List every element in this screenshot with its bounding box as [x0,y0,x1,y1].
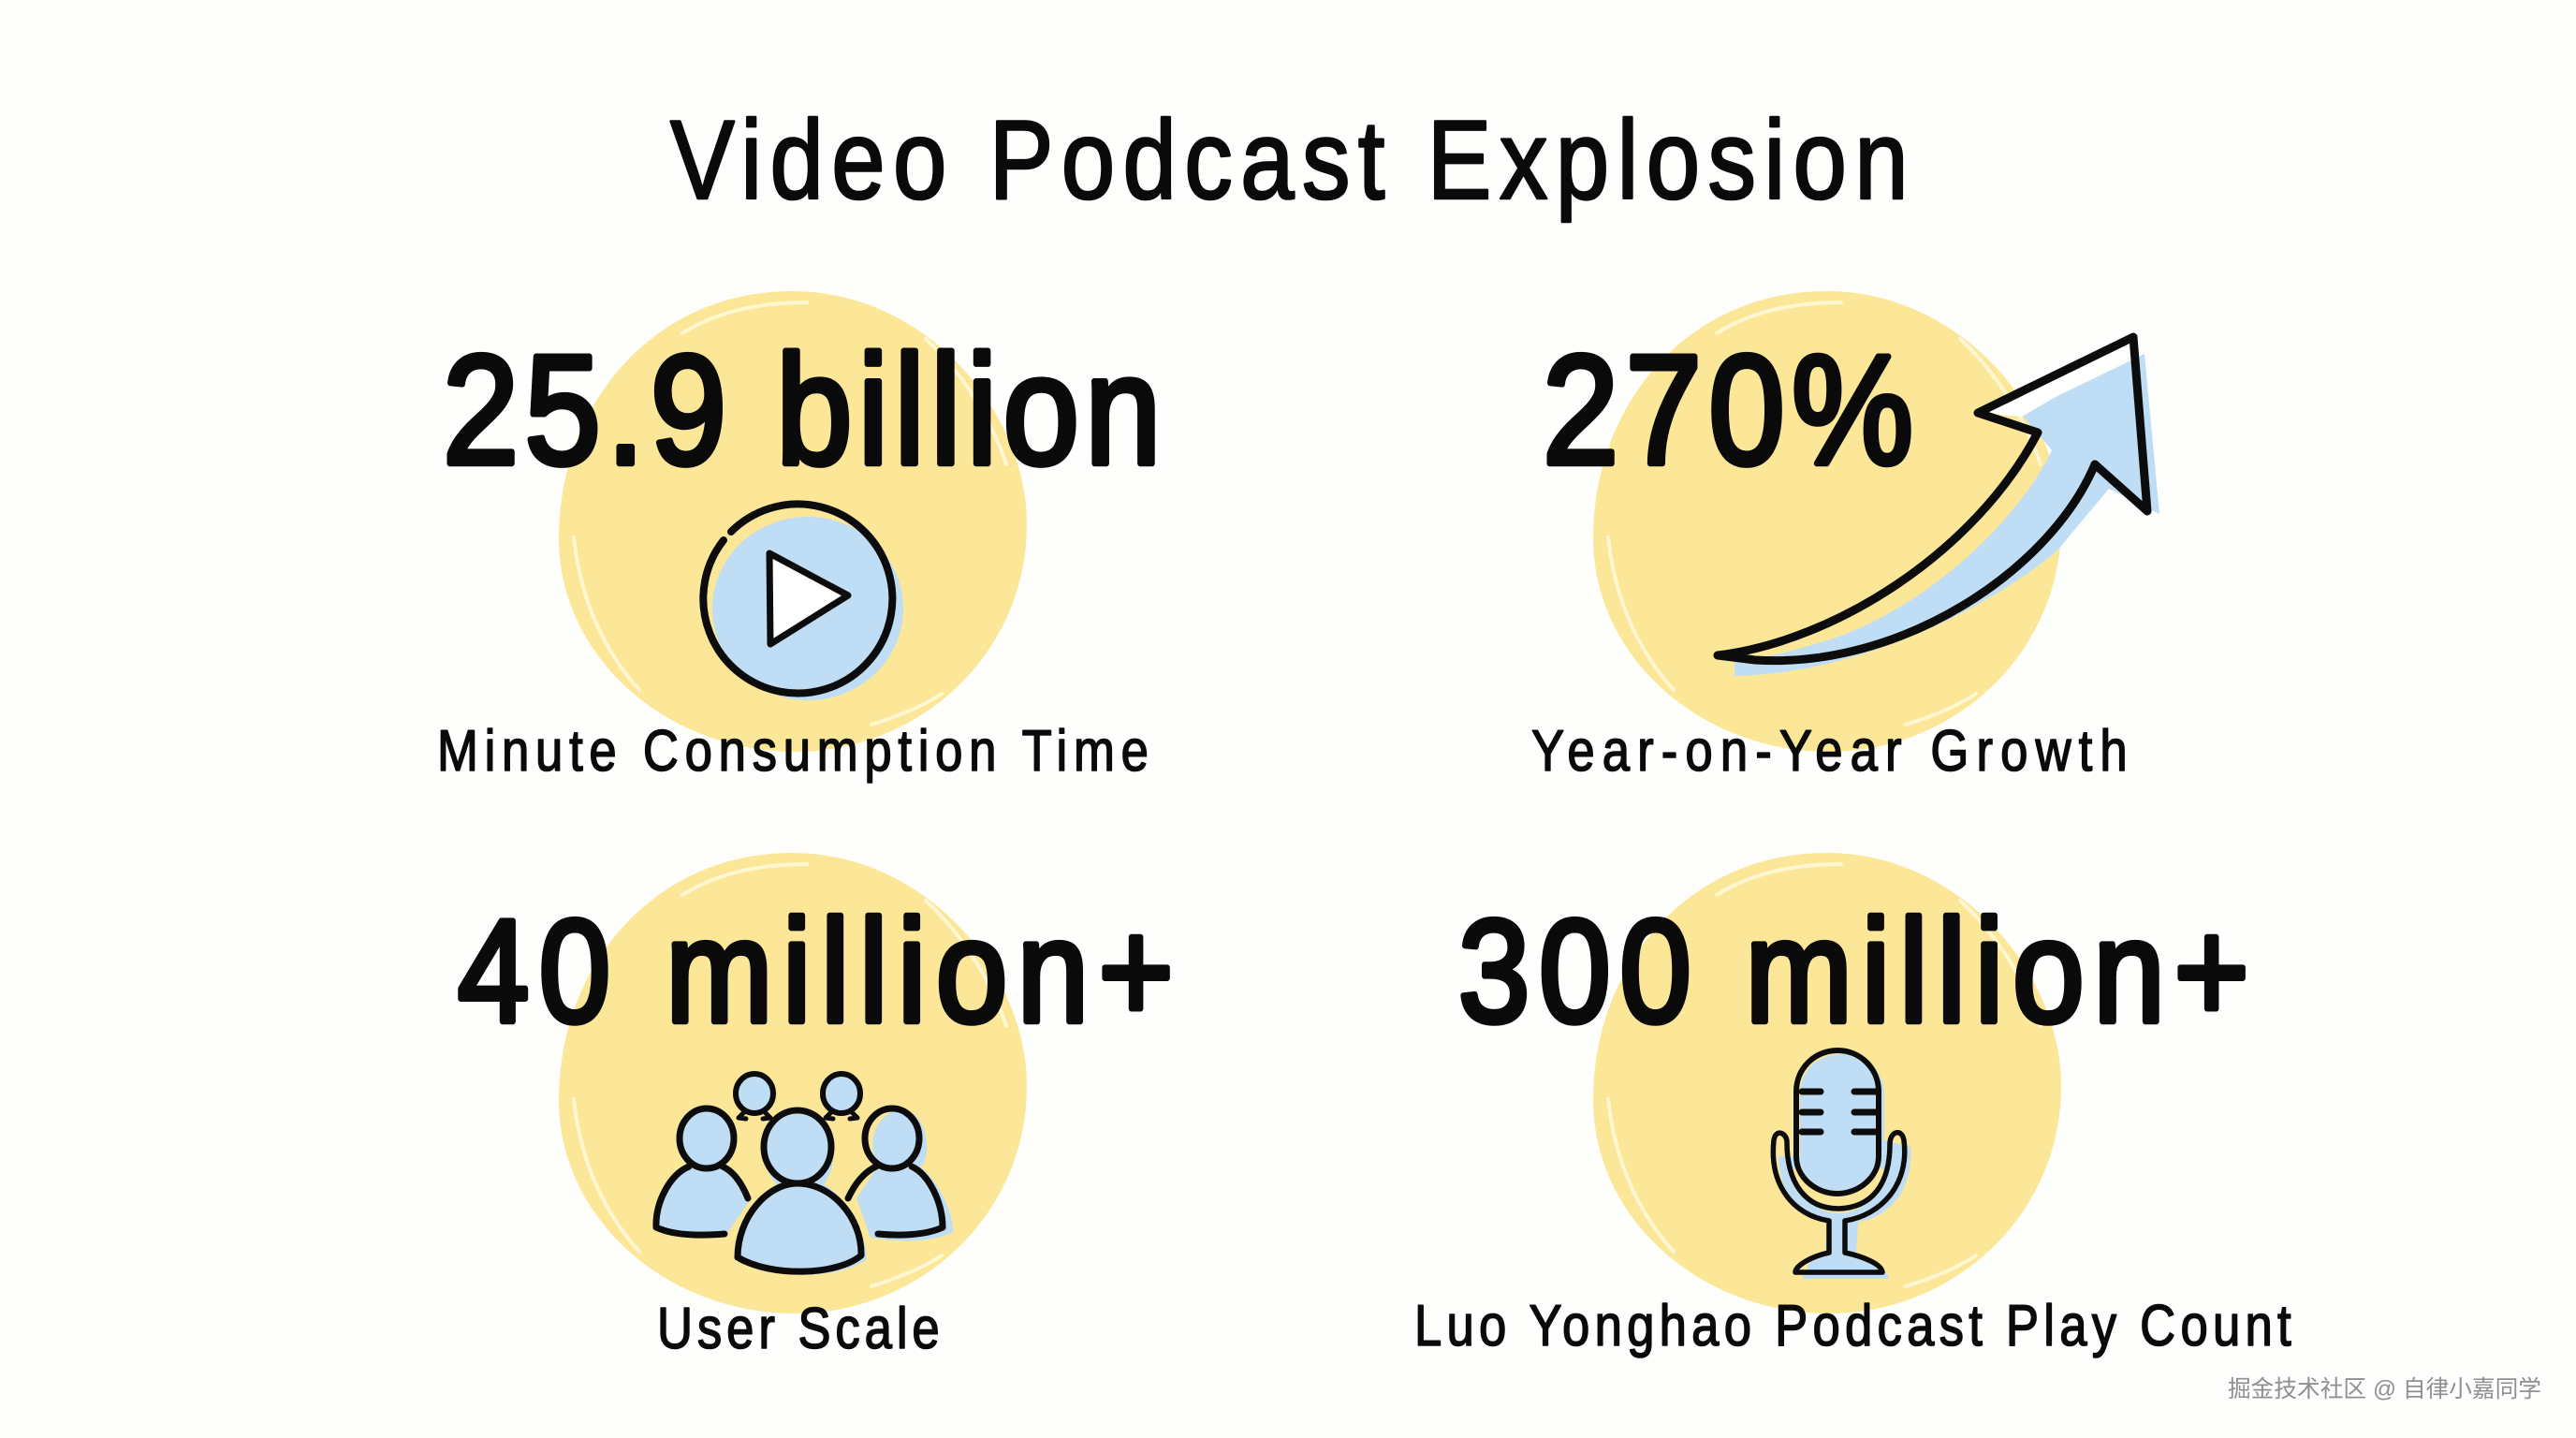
yellow blob [559,853,1027,1313]
panel: year-on-year growth [1531,291,2159,784]
big number: 270% [1543,323,1913,497]
right person [848,1108,953,1240]
panel: user scale [458,853,1174,1361]
big number: 300 million+ [1458,890,2249,1053]
icon: play button [703,504,903,700]
left person [656,1108,748,1237]
front person [738,1110,867,1275]
label: Minute Consumption Time [437,719,1149,784]
yellow blob [1593,291,2061,752]
label: Year-on-Year Growth [1531,719,2128,784]
watermark: 掘金技术社区 @ 自律小嘉同学 [2228,1376,2541,1402]
icon: microphone [1773,1050,1910,1279]
panel: minute consumption time [437,291,1161,784]
label: User Scale [657,1297,940,1361]
small background heads [736,1074,860,1119]
title: Video Podcast Explosion [670,97,1909,223]
label: Luo Yonghao Podcast Play Count [1414,1294,2291,1358]
yellow blob [1593,853,2061,1313]
panel: podcast play count [1414,853,2291,1358]
big number: 25.9 billion [443,323,1161,497]
yellow blob [559,291,1027,752]
icon: rising arrow [1718,337,2159,676]
icon: group of people [656,1074,953,1275]
big number: 40 million+ [458,890,1174,1053]
